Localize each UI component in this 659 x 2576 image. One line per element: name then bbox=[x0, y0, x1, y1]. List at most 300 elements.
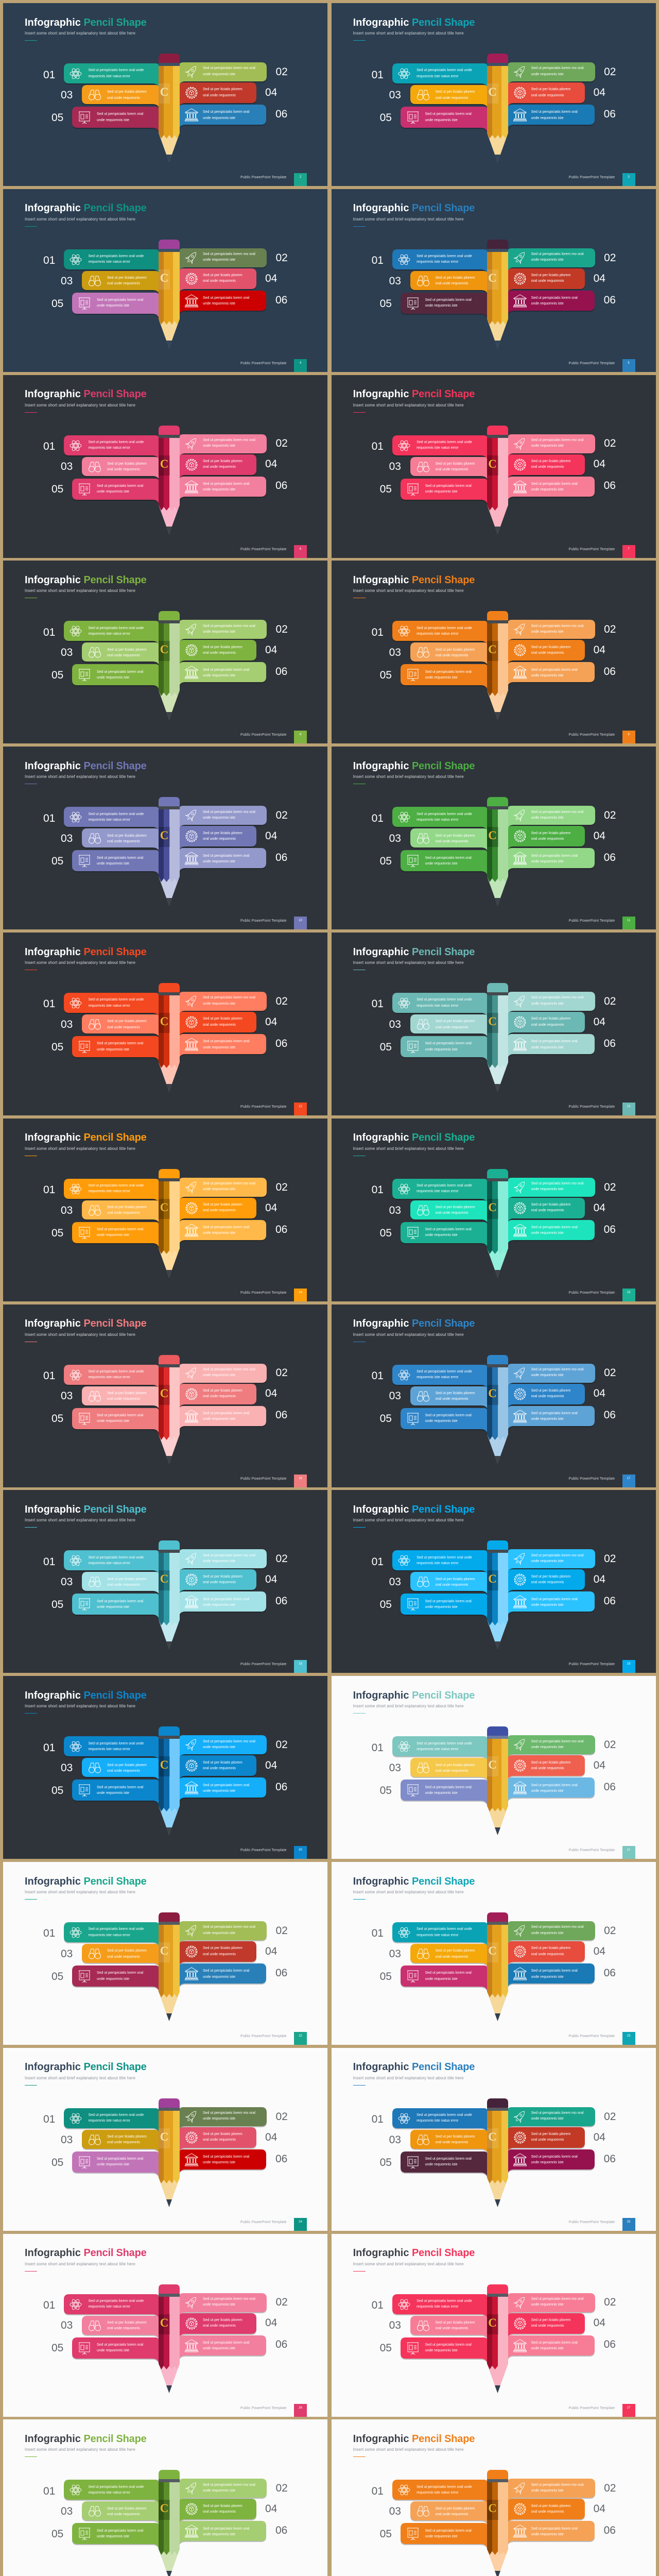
step 03: oral unde requomnis bbox=[436, 2513, 468, 2516]
step 02: 02 bbox=[604, 252, 616, 264]
step 01: 01 bbox=[43, 255, 55, 266]
page number: 6 bbox=[300, 548, 301, 551]
step 02: unde requomnis iste bbox=[531, 1931, 564, 1935]
page number: 8 bbox=[300, 733, 301, 736]
step 04: oral unde requomnis bbox=[203, 2324, 236, 2328]
panel: slide 25 bbox=[332, 2048, 656, 2231]
step 04: oral unde requomnis bbox=[203, 1023, 236, 1027]
step 06 bbox=[507, 1777, 616, 1802]
step 03: Sed ut per liciatis plorem bbox=[107, 1578, 147, 1581]
step 03: 03 bbox=[389, 89, 401, 101]
step 01: 01 bbox=[43, 440, 55, 452]
step 05 bbox=[380, 1594, 488, 1619]
panel: slide 14 bbox=[3, 1118, 327, 1301]
step 05: 05 bbox=[51, 112, 63, 124]
title: Infographic Pencil Shape bbox=[353, 1504, 475, 1515]
step 06: Sed ut perspiciatis lorem oral bbox=[531, 2155, 578, 2159]
pencil: C bbox=[160, 829, 168, 842]
step 02: Sed ut perspiciatis lorem mo oral bbox=[203, 66, 255, 70]
page number bbox=[622, 731, 635, 743]
page number bbox=[622, 2218, 635, 2231]
step 06 bbox=[180, 291, 287, 314]
footer: Public PowerPoint Template bbox=[240, 2221, 287, 2224]
step 04: 04 bbox=[265, 830, 277, 842]
step 06 bbox=[507, 2149, 616, 2174]
step 03: Sed ut per liciatis plorem bbox=[107, 1392, 147, 1395]
step 05: Sed ut perspiciatis lorem oral bbox=[425, 2529, 472, 2533]
step 02: unde requomnis iste bbox=[203, 1188, 235, 1191]
step 04: oral unde requomnis bbox=[531, 1395, 564, 1398]
pencil bbox=[487, 1726, 508, 1835]
step 04: oral unde requomnis bbox=[531, 2138, 564, 2142]
step 02: Sed ut perspiciatis lorem mo oral bbox=[203, 624, 255, 628]
step 04: Sed ut per liciatis plorem bbox=[203, 1203, 242, 1207]
step 03: Sed ut per liciatis plorem bbox=[107, 2321, 147, 2325]
step 01: Sed ut perspiciatis lorem oral unde bbox=[89, 998, 144, 1002]
step 01: 01 bbox=[372, 255, 384, 266]
step 04: oral unde requomnis bbox=[203, 1767, 236, 1770]
step 06 bbox=[508, 105, 616, 128]
step 02 bbox=[507, 1921, 616, 1944]
footer: Public PowerPoint Template bbox=[569, 1291, 615, 1295]
step 01 bbox=[43, 1365, 160, 1389]
step 05: Sed ut perspiciatis lorem oral bbox=[97, 2343, 143, 2347]
step 06: Sed ut perspiciatis lorem oral bbox=[531, 1040, 578, 1043]
step 04: 04 bbox=[265, 1202, 277, 1214]
step 05 bbox=[380, 2151, 488, 2177]
step 03: 03 bbox=[61, 1390, 73, 1402]
step 06: Sed ut perspiciatis lorem oral bbox=[531, 2527, 578, 2531]
step 02 bbox=[507, 434, 616, 457]
page number bbox=[294, 2218, 307, 2231]
step 06: 06 bbox=[604, 1781, 616, 1793]
step 01 bbox=[372, 1179, 488, 1203]
step 01: 01 bbox=[372, 1742, 384, 1754]
title: Infographic Pencil Shape bbox=[353, 1132, 475, 1143]
step 03: 03 bbox=[61, 2319, 73, 2331]
footer: Public PowerPoint Template bbox=[569, 919, 615, 923]
page number: 7 bbox=[628, 548, 630, 551]
step 05: unde requomnis iste bbox=[97, 1048, 129, 1052]
step 03 bbox=[389, 1014, 488, 1036]
step 05: Sed ut perspiciatis lorem oral bbox=[97, 2157, 143, 2161]
step 05: unde requomnis iste bbox=[425, 1233, 458, 1237]
step 03 bbox=[389, 457, 488, 478]
step 02: Sed ut perspiciatis lorem mo oral bbox=[531, 2483, 584, 2487]
step 04: oral unde requomnis bbox=[203, 1953, 236, 1956]
step 06: Sed ut perspiciatis lorem oral bbox=[531, 1784, 578, 1787]
step 03 bbox=[389, 1200, 488, 1222]
step 04: 04 bbox=[265, 1759, 277, 1771]
step 01: requomnis iste natus error bbox=[89, 446, 130, 450]
step 03: oral unde requomnis bbox=[107, 282, 140, 285]
step 05: unde requomnis iste bbox=[425, 1048, 458, 1052]
step 02: Sed ut perspiciatis lorem mo oral bbox=[531, 624, 584, 628]
step 03: oral unde requomnis bbox=[107, 1397, 140, 1401]
step 06: unde requomnis iste bbox=[203, 2161, 235, 2164]
pencil bbox=[487, 2098, 508, 2207]
page number bbox=[622, 1846, 635, 1859]
step 06: Sed ut perspiciatis lorem oral bbox=[203, 482, 249, 486]
page number: 18 bbox=[299, 1663, 302, 1666]
page number bbox=[622, 1103, 635, 1115]
step 04: 04 bbox=[594, 458, 605, 470]
pencil: C bbox=[160, 1572, 168, 1585]
step 04: 04 bbox=[594, 1573, 605, 1585]
step 06 bbox=[179, 1220, 288, 1244]
step 01: Sed ut perspiciatis lorem oral unde bbox=[89, 2485, 144, 2489]
pencil: C bbox=[160, 2502, 168, 2515]
step 05: 05 bbox=[380, 669, 392, 681]
step 02: 02 bbox=[604, 995, 616, 1007]
step 05: 05 bbox=[380, 112, 392, 124]
step 01: 01 bbox=[372, 626, 384, 638]
step 04 bbox=[179, 1569, 278, 1591]
step 05: Sed ut perspiciatis lorem oral bbox=[97, 484, 143, 488]
footer: Public PowerPoint Template bbox=[569, 1105, 615, 1109]
step 04: 04 bbox=[594, 830, 605, 842]
step 05: 05 bbox=[51, 1599, 63, 1611]
step 01 bbox=[372, 2108, 488, 2132]
step 05: unde requomnis iste bbox=[97, 2349, 129, 2352]
panel: slide 20 bbox=[3, 1676, 327, 1859]
pencil bbox=[487, 611, 508, 720]
step 05: 05 bbox=[51, 1413, 63, 1425]
title: Infographic Pencil Shape bbox=[353, 388, 475, 400]
pencil bbox=[487, 2470, 508, 2576]
subtitle: Insert some short and brief explanatory text about title here bbox=[353, 1890, 464, 1894]
panel: slide 3 bbox=[332, 3, 656, 186]
step 02: unde requomnis iste bbox=[203, 816, 235, 820]
title: Infographic Pencil Shape bbox=[353, 202, 475, 214]
step 01: Sed ut perspiciatis lorem oral unde bbox=[417, 812, 472, 816]
step 01: Sed ut perspiciatis lorem oral unde bbox=[417, 626, 472, 630]
step 06 bbox=[179, 1963, 288, 1988]
panel: slide 22 bbox=[3, 1862, 327, 2045]
panel: slide 10 bbox=[3, 747, 327, 929]
step 01: 01 bbox=[372, 2485, 384, 2497]
step 01: 01 bbox=[43, 2299, 55, 2311]
step 05: 05 bbox=[380, 1413, 392, 1425]
step 02: 02 bbox=[604, 809, 616, 821]
step 01: Sed ut perspiciatis lorem oral unde bbox=[89, 440, 144, 444]
step 04: 04 bbox=[594, 1202, 605, 1214]
step 06: unde requomnis iste bbox=[531, 2161, 564, 2164]
step 02: unde requomnis iste bbox=[531, 816, 564, 820]
step 05: Sed ut perspiciatis lorem oral bbox=[97, 1786, 143, 1789]
step 03 bbox=[389, 2316, 488, 2337]
step 05: Sed ut perspiciatis lorem oral bbox=[425, 484, 472, 488]
step 05: 05 bbox=[51, 2528, 63, 2540]
step 06: 06 bbox=[604, 1409, 616, 1421]
step 06 bbox=[179, 1406, 288, 1430]
step 06 bbox=[507, 1406, 616, 1430]
step 02: 02 bbox=[604, 1553, 616, 1565]
subtitle: Insert some short and brief explanatory text about title here bbox=[353, 774, 464, 779]
step 01: 01 bbox=[43, 1742, 55, 1754]
footer: Public PowerPoint Template bbox=[569, 362, 615, 365]
step 01: 01 bbox=[372, 1927, 384, 1939]
step 01 bbox=[43, 1550, 160, 1574]
page number: 11 bbox=[627, 919, 630, 922]
step 04: oral unde requomnis bbox=[531, 2510, 564, 2514]
page number: 15 bbox=[627, 1291, 630, 1294]
step 05: unde requomnis iste bbox=[425, 1419, 458, 1423]
step 02: unde requomnis iste bbox=[203, 2303, 235, 2307]
step 06: Sed ut perspiciatis lorem oral bbox=[531, 1226, 578, 1229]
step 02: unde requomnis iste bbox=[531, 73, 564, 76]
step 01 bbox=[43, 2480, 160, 2504]
step 03: Sed ut per liciatis plorem bbox=[107, 834, 147, 838]
step 06: 06 bbox=[275, 1409, 287, 1421]
step 03 bbox=[389, 85, 487, 108]
step 06: unde requomnis iste bbox=[531, 488, 564, 492]
step 05 bbox=[51, 293, 159, 318]
step 06: 06 bbox=[604, 666, 616, 677]
page number bbox=[294, 1103, 307, 1115]
footer: Public PowerPoint Template bbox=[569, 1663, 615, 1666]
step 03 bbox=[389, 1386, 488, 1408]
pencil bbox=[159, 797, 180, 906]
step 06: Sed ut perspiciatis lorem oral bbox=[203, 1226, 249, 1229]
step 02: 02 bbox=[276, 1181, 288, 1193]
step 04: 04 bbox=[265, 2317, 277, 2329]
step 03: 03 bbox=[61, 833, 73, 844]
step 03: oral unde requomnis bbox=[107, 2141, 140, 2144]
step 02: 02 bbox=[276, 252, 288, 264]
step 02: 02 bbox=[604, 437, 616, 449]
step 04: Sed ut per liciatis plorem bbox=[203, 2132, 242, 2136]
footer: Public PowerPoint Template bbox=[240, 1663, 287, 1666]
step 01: Sed ut perspiciatis lorem oral unde bbox=[89, 2299, 144, 2303]
pencil bbox=[487, 983, 508, 1092]
step 03: oral unde requomnis bbox=[107, 840, 140, 843]
panel: slide 13 bbox=[332, 933, 656, 1115]
step 04: oral unde requomnis bbox=[531, 1953, 564, 1956]
step 01: requomnis iste natus error bbox=[417, 1190, 458, 1193]
step 05 bbox=[51, 479, 159, 504]
subtitle: Insert some short and brief explanatory text about title here bbox=[353, 960, 464, 965]
step 05: Sed ut perspiciatis lorem oral bbox=[425, 1600, 472, 1603]
page number: 23 bbox=[627, 2035, 630, 2038]
step 03: oral unde requomnis bbox=[436, 1955, 468, 1959]
step 04: 04 bbox=[265, 644, 277, 656]
step 06: 06 bbox=[275, 108, 287, 120]
page number bbox=[294, 1475, 307, 1487]
title: Infographic Pencil Shape bbox=[353, 1318, 475, 1329]
step 01: 01 bbox=[43, 1184, 55, 1196]
step 01: requomnis iste natus error bbox=[89, 818, 130, 822]
step 03: 03 bbox=[389, 2505, 401, 2517]
pencil: C bbox=[160, 457, 168, 470]
step 03: Sed ut per liciatis plorem bbox=[107, 1020, 147, 1023]
page number bbox=[294, 173, 307, 186]
step 03: 03 bbox=[61, 1019, 73, 1030]
footer: Public PowerPoint Template bbox=[240, 1477, 287, 1481]
step 02: Sed ut perspiciatis lorem mo oral bbox=[531, 252, 584, 256]
step 03: 03 bbox=[389, 1762, 401, 1774]
step 02: 02 bbox=[276, 2111, 288, 2123]
step 05: unde requomnis iste bbox=[97, 862, 129, 866]
step 05 bbox=[380, 2337, 488, 2363]
step 03: 03 bbox=[61, 1948, 73, 1960]
step 04: Sed ut per liciatis plorem bbox=[203, 832, 242, 835]
step 01: Sed ut perspiciatis lorem oral unde bbox=[417, 2113, 472, 2117]
step 02: unde requomnis iste bbox=[203, 444, 235, 448]
pencil bbox=[487, 797, 508, 906]
step 06: unde requomnis iste bbox=[531, 2347, 564, 2350]
step 01: requomnis iste natus error bbox=[89, 1748, 130, 1751]
step 01: requomnis iste natus error bbox=[417, 446, 458, 450]
step 04: 04 bbox=[594, 2131, 605, 2143]
step 04 bbox=[180, 82, 277, 106]
step 02: Sed ut perspiciatis lorem mo oral bbox=[203, 996, 255, 999]
pencil: C bbox=[488, 643, 497, 656]
step 02: 02 bbox=[276, 809, 288, 821]
page number: 24 bbox=[299, 2221, 302, 2224]
step 06: 06 bbox=[604, 1224, 616, 1235]
step 01 bbox=[43, 807, 160, 831]
step 03: Sed ut per liciatis plorem bbox=[107, 1206, 147, 1209]
step 03: 03 bbox=[389, 1019, 401, 1030]
step 02: unde requomnis iste bbox=[531, 630, 564, 634]
step 05 bbox=[51, 1594, 160, 1619]
step 01: Sed ut perspiciatis lorem oral unde bbox=[417, 2485, 472, 2489]
step 02: unde requomnis iste bbox=[531, 258, 564, 262]
step 06: unde requomnis iste bbox=[531, 1603, 564, 1607]
panel: slide 11 bbox=[332, 747, 656, 929]
subtitle: Insert some short and brief explanatory text about title here bbox=[353, 2262, 464, 2266]
step 01: 01 bbox=[43, 1927, 55, 1939]
subtitle: Insert some short and brief explanatory text about title here bbox=[25, 1704, 135, 1708]
panel: slide 27 bbox=[332, 2234, 656, 2417]
step 05 bbox=[51, 1036, 160, 1062]
step 05: unde requomnis iste bbox=[425, 862, 458, 866]
page number bbox=[294, 2404, 307, 2417]
step 03: oral unde requomnis bbox=[436, 1769, 468, 1773]
step 06: unde requomnis iste bbox=[531, 674, 564, 677]
step 03: oral unde requomnis bbox=[436, 96, 468, 100]
page number: 10 bbox=[299, 919, 302, 922]
step 05: 05 bbox=[380, 1599, 392, 1611]
step 01: requomnis iste natus error bbox=[417, 2119, 458, 2123]
step 06: unde requomnis iste bbox=[203, 1417, 235, 1421]
step 04: Sed ut per liciatis plorem bbox=[531, 2318, 570, 2322]
step 03: oral unde requomnis bbox=[107, 2327, 140, 2330]
step 01 bbox=[372, 621, 488, 645]
step 05: unde requomnis iste bbox=[425, 304, 458, 308]
page number: 16 bbox=[299, 1477, 302, 1480]
step 01 bbox=[372, 993, 488, 1017]
step 02 bbox=[179, 1178, 288, 1201]
step 02: unde requomnis iste bbox=[531, 2303, 564, 2307]
step 02: 02 bbox=[604, 1925, 616, 1937]
step 06 bbox=[179, 1777, 288, 1802]
pencil bbox=[159, 1169, 180, 1278]
step 01 bbox=[43, 1179, 160, 1203]
step 06: unde requomnis iste bbox=[203, 1046, 235, 1049]
step 02: 02 bbox=[276, 2482, 288, 2494]
step 04: 04 bbox=[265, 1573, 277, 1585]
step 01: 01 bbox=[372, 1370, 384, 1382]
title: Infographic Pencil Shape bbox=[25, 946, 147, 958]
subtitle: Insert some short and brief explanatory text about title here bbox=[25, 960, 135, 965]
subtitle: Insert some short and brief explanatory text about title here bbox=[25, 2262, 135, 2266]
step 01: Sed ut perspiciatis lorem oral unde bbox=[417, 1927, 472, 1931]
step 02: unde requomnis iste bbox=[203, 73, 235, 76]
step 04: Sed ut per liciatis plorem bbox=[531, 1575, 570, 1579]
step 01: requomnis iste natus error bbox=[417, 1004, 458, 1008]
step 05: unde requomnis iste bbox=[97, 304, 129, 308]
step 04 bbox=[179, 640, 278, 662]
step 01: Sed ut perspiciatis lorem oral unde bbox=[89, 2113, 144, 2117]
step 02 bbox=[507, 620, 616, 643]
step 06 bbox=[507, 1591, 616, 1616]
step 04: 04 bbox=[265, 1016, 277, 1028]
step 05: Sed ut perspiciatis lorem oral bbox=[97, 112, 143, 116]
step 05: 05 bbox=[380, 2157, 392, 2168]
step 03: Sed ut per liciatis plorem bbox=[436, 1578, 475, 1581]
footer: Public PowerPoint Template bbox=[240, 2406, 287, 2410]
step 06: Sed ut perspiciatis lorem oral bbox=[203, 1784, 249, 1787]
step 06: unde requomnis iste bbox=[203, 302, 235, 306]
step 04: oral unde requomnis bbox=[531, 1023, 564, 1027]
step 01: requomnis iste natus error bbox=[89, 260, 130, 264]
step 06: unde requomnis iste bbox=[531, 302, 564, 306]
panel: slide 17 bbox=[332, 1304, 656, 1487]
step 02: 02 bbox=[276, 1367, 288, 1379]
page number: 26 bbox=[299, 2406, 302, 2410]
step 06: 06 bbox=[604, 2338, 616, 2350]
step 01: 01 bbox=[43, 812, 55, 824]
step 01: requomnis iste natus error bbox=[89, 632, 130, 636]
step 01 bbox=[372, 2294, 488, 2318]
step 06 bbox=[507, 477, 616, 501]
title: Infographic Pencil Shape bbox=[25, 1132, 147, 1143]
pencil: C bbox=[160, 1944, 168, 1957]
footer: Public PowerPoint Template bbox=[240, 919, 287, 923]
footer: Public PowerPoint Template bbox=[569, 1477, 615, 1481]
step 02: Sed ut perspiciatis lorem mo oral bbox=[531, 438, 584, 442]
footer: Public PowerPoint Template bbox=[240, 2035, 287, 2038]
step 02 bbox=[179, 2107, 288, 2130]
step 05: 05 bbox=[380, 1971, 392, 1982]
step 01: Sed ut perspiciatis lorem oral unde bbox=[417, 1184, 472, 1188]
subtitle: Insert some short and brief explanatory text about title here bbox=[353, 403, 464, 408]
step 05: unde requomnis iste bbox=[425, 2535, 458, 2538]
step 06: 06 bbox=[275, 1038, 287, 1049]
step 01: 01 bbox=[372, 69, 384, 80]
subtitle: Insert some short and brief explanatory text about title here bbox=[353, 2447, 464, 2452]
page number: 25 bbox=[627, 2221, 630, 2224]
step 04: oral unde requomnis bbox=[531, 1767, 564, 1770]
subtitle: Insert some short and brief explanatory text about title here bbox=[353, 217, 464, 222]
step 04: 04 bbox=[594, 2317, 605, 2329]
step 04: Sed ut per liciatis plorem bbox=[531, 1761, 570, 1765]
page number bbox=[622, 545, 635, 558]
step 03: Sed ut per liciatis plorem bbox=[436, 2507, 475, 2511]
step 06: Sed ut perspiciatis lorem oral bbox=[203, 1598, 249, 1601]
step 03: oral unde requomnis bbox=[436, 1026, 468, 1029]
page number: 3 bbox=[628, 176, 630, 179]
step 03: Sed ut per liciatis plorem bbox=[107, 2135, 147, 2139]
step 06: 06 bbox=[275, 294, 287, 306]
step 01: Sed ut perspiciatis lorem oral unde bbox=[89, 1184, 144, 1188]
step 02: unde requomnis iste bbox=[203, 258, 235, 262]
title: Infographic Pencil Shape bbox=[353, 1690, 475, 1701]
step 02: Sed ut perspiciatis lorem mo oral bbox=[531, 66, 584, 70]
step 06 bbox=[507, 1034, 616, 1058]
